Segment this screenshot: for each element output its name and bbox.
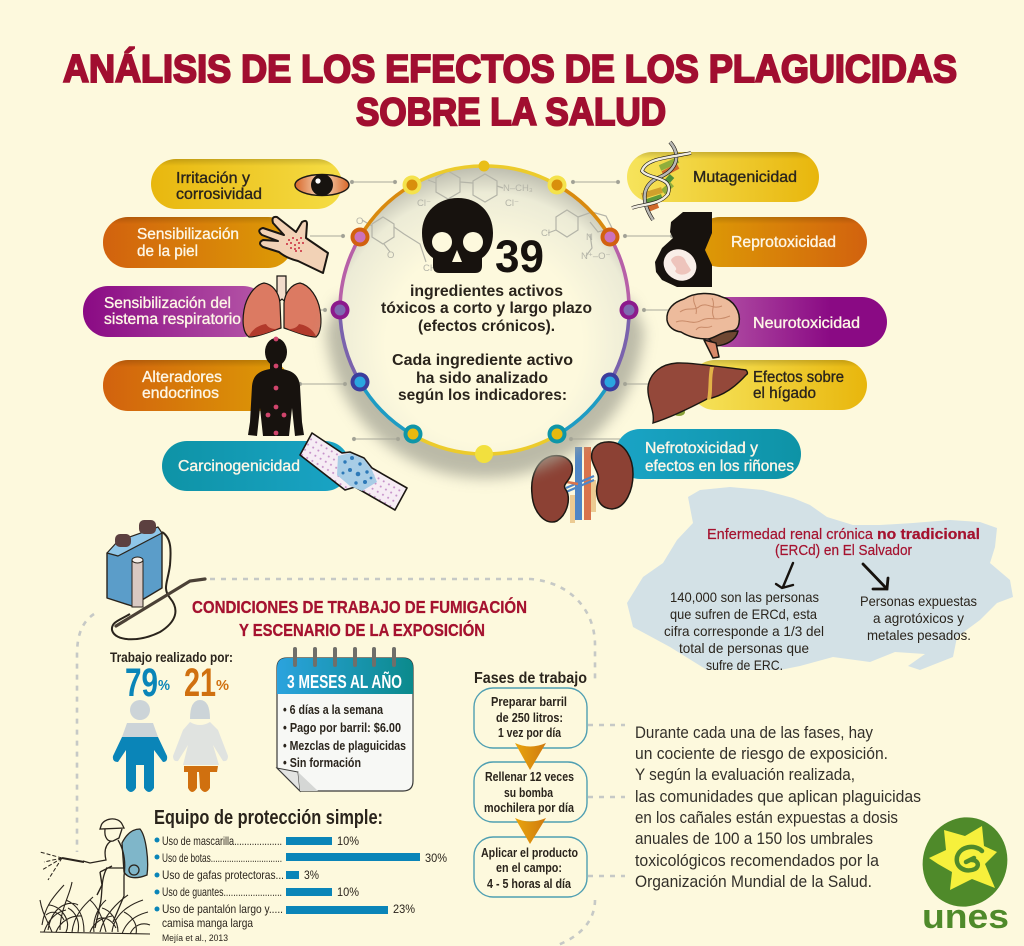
- panel: who does the work: [110, 650, 233, 792]
- paragraph: exposure risk: toxicológicos recomendados por la: [635, 852, 880, 870]
- panel: protection equipment: [154, 807, 447, 944]
- map right text: Personas expuestas: [860, 593, 977, 609]
- icon: brain: [667, 293, 739, 358]
- calendar list: • Pago por barril: $6.00: [283, 720, 401, 735]
- map left text: que sufren de ERCd, esta: [670, 606, 817, 622]
- paragraph: exposure risk: Organización Mundial de la Salud.: [635, 873, 872, 891]
- icon: DNA helix: [632, 142, 691, 220]
- pill: Carcinogenicidad: [162, 433, 407, 510]
- shadow under ring: [326, 300, 644, 478]
- row: guantes: Uso de guantes........................: [162, 885, 282, 899]
- icon: woman figure: [173, 700, 228, 792]
- title: ANÁLISIS DE LOS EFECTOS DE LOS PLAGUICIDAS: [63, 47, 957, 91]
- row: botas: [154, 851, 447, 865]
- icon: backpack sprayer: [107, 520, 205, 639]
- map right text: [860, 593, 977, 643]
- phase box 3: 4 - 5 horas al día: [487, 877, 572, 891]
- arrow: to right text: [863, 564, 888, 589]
- pill: Neurotoxicidad: Neurotoxicidad: [753, 315, 860, 332]
- row: botas: 30%: [425, 851, 447, 865]
- pill: Neurotoxicidad: [667, 293, 887, 358]
- phase box 1: 1 vez por día: [498, 726, 562, 740]
- pill: Sensibilización de la piel: de la piel: [137, 243, 198, 260]
- phase box 3: en el campo:: [496, 861, 562, 875]
- heading: working conditions: CONDICIONES DE TRABAJO DE FUMIGACIÓN: [192, 596, 527, 617]
- pill: Nefrotoxicidad y efectos en los riñones: Nefrotoxicidad y: [645, 440, 758, 457]
- row: pantalón: 23%: [393, 902, 415, 916]
- stat: 21 percent: 21: [184, 661, 216, 705]
- map panel: El Salvador: [627, 487, 1013, 673]
- pill: Sensibilización del sistema respiratorio: [83, 276, 321, 337]
- source note: Mejía et al., 2013: [162, 933, 228, 944]
- map right text: metales pesados.: [867, 627, 971, 643]
- row: gafas: 3%: [304, 868, 319, 882]
- stat: 21 percent: %: [216, 677, 229, 694]
- icon: kidneys: [532, 442, 633, 523]
- pill: Irritación y corrosividad: Irritación y: [176, 170, 250, 187]
- dashed frame of working conditions panel: [77, 579, 625, 946]
- phase box 2: [474, 762, 587, 822]
- title: SOBRE LA SALUD: [356, 91, 666, 134]
- centre text: según los indicadores:: [398, 387, 567, 404]
- panel: protection equipment: Equipo de protección simple:: [154, 807, 383, 829]
- calendar list: • 6 días a la semana: [283, 702, 384, 717]
- phase box 3: [474, 837, 587, 897]
- paragraph: exposure risk: anuales de 100 a 150 los umbrales: [635, 830, 873, 848]
- phase box 3: Aplicar el producto: [481, 846, 578, 860]
- panel: calendar: [277, 649, 413, 791]
- pill: Irritación y corrosividad: [151, 159, 349, 209]
- molecule diagrams: [356, 171, 612, 274]
- paragraph: exposure risk: en los cañales están expuestas a dosis: [635, 809, 898, 827]
- pill: Efectos sobre el hígado: Efectos sobre: [753, 369, 844, 386]
- map heading: Enfermedad renal crónica: [707, 527, 874, 543]
- pill: Sensibilización de la piel: Sensibilización: [137, 226, 239, 243]
- icon: man figure: [113, 700, 167, 792]
- icon: eye: [295, 174, 349, 196]
- arrow: phase 1 to 2: [515, 743, 546, 770]
- pill: Alteradores endocrinos: [103, 337, 304, 436]
- grass: [40, 882, 150, 934]
- icon: farmer spraying: [40, 819, 150, 934]
- molecule diagrams: N–CH₃: [503, 183, 533, 194]
- molecule diagrams: N⁺–O⁻: [581, 251, 611, 262]
- calendar list: • Sin formación: [283, 755, 361, 770]
- stat: 79 percent: %: [158, 677, 170, 694]
- pill: Carcinogenicidad: Carcinogenicidad: [178, 458, 300, 475]
- pill: Mutagenicidad: [627, 142, 819, 220]
- pill: Reprotoxicidad: [655, 212, 867, 287]
- pill: Mutagenicidad: Mutagenicidad: [693, 169, 797, 186]
- arrow: to left text: [776, 563, 793, 588]
- pill: Sensibilización del sistema respiratorio: sistema respiratorio: [104, 311, 241, 328]
- centre text: ha sido analizado: [416, 370, 548, 387]
- pill: Nefrotoxicidad y efectos en los riñones: efectos en los riñones: [645, 458, 794, 475]
- paragraph: exposure risk: las comunidades que aplican plaguicidas: [635, 788, 921, 806]
- logo: UNES: [910, 805, 1020, 936]
- icon: skull: [422, 198, 493, 273]
- row: mascarilla: 10%: [337, 834, 359, 848]
- centre text: [381, 283, 592, 404]
- molecule diagrams: O: [387, 250, 394, 261]
- pill: Nefrotoxicidad y efectos en los riñones: [532, 429, 801, 523]
- row: pantalón: Uso de pantalón largo y.....: [162, 902, 283, 916]
- pill: Alteradores endocrinos: endocrinos: [142, 385, 219, 402]
- icon: tissue with tumour: [300, 433, 407, 510]
- row: guantes: 10%: [337, 885, 359, 899]
- paragraph: exposure risk: [635, 724, 921, 891]
- row: mascarilla: Uso de mascarilla...................: [162, 834, 282, 848]
- number 39: 39: [495, 231, 544, 282]
- map left text: sufre de ERC.: [706, 657, 783, 673]
- molecule diagrams: Cl: [541, 228, 550, 239]
- pill: Efectos sobre el hígado: el hígado: [753, 385, 816, 402]
- molecule diagrams: O: [356, 216, 363, 227]
- icon: liver: [648, 363, 748, 423]
- heading: working conditions: Y ESCENARIO DE LA EXPOSICIÓN: [239, 619, 485, 640]
- pill: Sensibilización del sistema respiratorio: Sensibilización del: [104, 295, 231, 312]
- molecule diagrams: N: [586, 232, 593, 243]
- phase box 2: mochilera por día: [484, 801, 575, 815]
- pill: Irritación y corrosividad: corrosividad: [176, 186, 262, 203]
- phase box 1: de 250 litros:: [496, 711, 563, 725]
- centre text: tóxicos a corto y largo plazo: [381, 300, 592, 317]
- molecule diagrams: CH₃: [423, 263, 441, 274]
- logo wordmark: unes: [922, 898, 1009, 936]
- map right text: a agrotóxicos y: [873, 610, 964, 626]
- row: gafas: Uso de gafas protectoras...: [162, 868, 284, 882]
- panel: who does the work: Trabajo realizado por:: [110, 650, 233, 665]
- paragraph: exposure risk: Durante cada una de las fases, hay: [635, 724, 874, 742]
- heading: working conditions: [192, 596, 527, 640]
- phase box 1: [474, 688, 587, 748]
- stat: 79 percent: 79: [125, 661, 158, 705]
- row: botas: Uso de botas...............................: [162, 851, 282, 865]
- central ring disc: [340, 166, 628, 454]
- ring nodes: [330, 160, 638, 463]
- pill: Sensibilización de la piel: [103, 217, 328, 273]
- pill: Efectos sobre el hígado: [648, 360, 867, 423]
- pill: Alteradores endocrinos: Alteradores: [142, 369, 222, 386]
- phase box 1: Preparar barril: [491, 695, 567, 709]
- panel: work phases: Fases de trabajo: [474, 670, 587, 687]
- map heading: [707, 527, 980, 559]
- ring arcs: [340, 166, 629, 454]
- centre text: Cada ingrediente activo: [392, 352, 573, 369]
- map heading: (ERCd) en El Salvador: [775, 543, 912, 559]
- connector lines: [298, 180, 674, 441]
- paragraph: exposure risk: Y según la evaluación realizada,: [635, 766, 855, 784]
- icon: lungs: [243, 276, 321, 337]
- row: pantalón: [154, 902, 415, 930]
- map left text: cifra corresponde a 1/3 del: [664, 623, 824, 639]
- pill: Reprotoxicidad: Reprotoxicidad: [731, 234, 836, 251]
- calendar list: • Mezclas de plaguicidas: [283, 738, 406, 753]
- calendar list: [283, 702, 406, 770]
- centre text: (efectos crónicos).: [418, 318, 555, 335]
- title: [63, 47, 957, 134]
- row: pantalón: camisa manga larga: [162, 916, 253, 930]
- arrow: phase 2 to 3: [515, 818, 546, 844]
- phase box 2: Rellenar 12 veces: [485, 770, 574, 784]
- calendar header text: 3 MESES AL AÑO: [287, 671, 402, 692]
- map heading: no tradicional: [877, 527, 980, 543]
- icon: body with glands: [248, 337, 304, 436]
- panel: work phases: [474, 670, 587, 897]
- icon: pregnant silhouette: [655, 212, 712, 287]
- molecule diagrams: Cl⁻: [417, 198, 431, 209]
- icon: hand with rash: [259, 217, 328, 273]
- centre text: ingredientes activos: [410, 283, 563, 300]
- molecule diagrams: Cl⁻: [505, 198, 519, 209]
- phase box 2: su bomba: [504, 786, 554, 800]
- map left text: 140,000 son las personas: [670, 589, 819, 605]
- map left text: total de personas que: [679, 640, 809, 656]
- map left text: [664, 589, 824, 673]
- paragraph: exposure risk: un cociente de riesgo de exposición.: [635, 745, 888, 763]
